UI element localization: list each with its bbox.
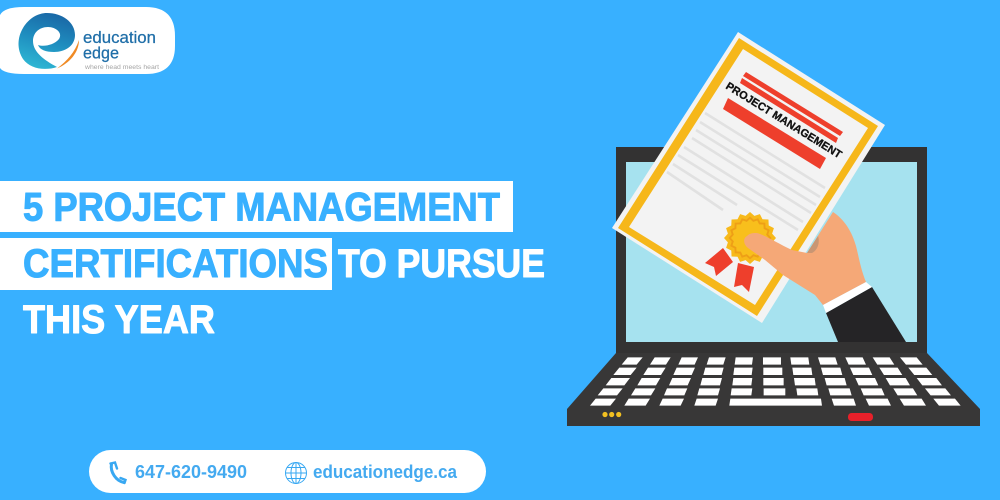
contact bar <box>89 450 486 493</box>
certificate gold border <box>618 38 878 316</box>
title highlight band 2 <box>0 238 332 290</box>
ribbon tails <box>705 248 754 292</box>
logo badge <box>0 7 175 74</box>
icon: globe <box>286 462 306 484</box>
title line 2 plain: TO PURSUE <box>338 242 545 286</box>
red button <box>848 413 873 421</box>
laptop screen <box>616 147 927 354</box>
certificate title: PROJECT MANAGEMENT <box>723 80 844 161</box>
hand holding certificate <box>744 212 872 313</box>
logo wordmark <box>83 29 159 71</box>
logo wordmark: education <box>83 29 156 47</box>
logo wordmark: edge <box>83 44 119 62</box>
title line 1: 5 PROJECT MANAGEMENT <box>23 186 500 230</box>
certificate paper <box>612 32 885 323</box>
gold seal <box>724 212 776 264</box>
logo wordmark: where head meets heart <box>84 64 159 71</box>
laptop <box>567 147 980 426</box>
phone number: 647-620-9490 <box>135 461 247 482</box>
laptop keyboard base <box>567 353 980 426</box>
title highlight band 1 <box>0 181 513 232</box>
suit sleeve <box>826 287 906 342</box>
title line 3: THIS YEAR <box>23 298 215 342</box>
certificate <box>612 32 885 323</box>
website: educationedge.ca <box>313 461 458 482</box>
red header stripes <box>723 72 843 169</box>
icon: logo swirl <box>18 13 79 69</box>
title <box>0 181 545 342</box>
shirt cuff <box>823 282 872 313</box>
finger shadow <box>807 236 819 253</box>
keyboard keys <box>590 357 961 406</box>
icon: phone <box>110 462 126 483</box>
indicator lights <box>602 412 621 417</box>
title line 2 highlighted: CERTIFICATIONS <box>23 242 328 286</box>
certificate body lines <box>667 113 825 230</box>
